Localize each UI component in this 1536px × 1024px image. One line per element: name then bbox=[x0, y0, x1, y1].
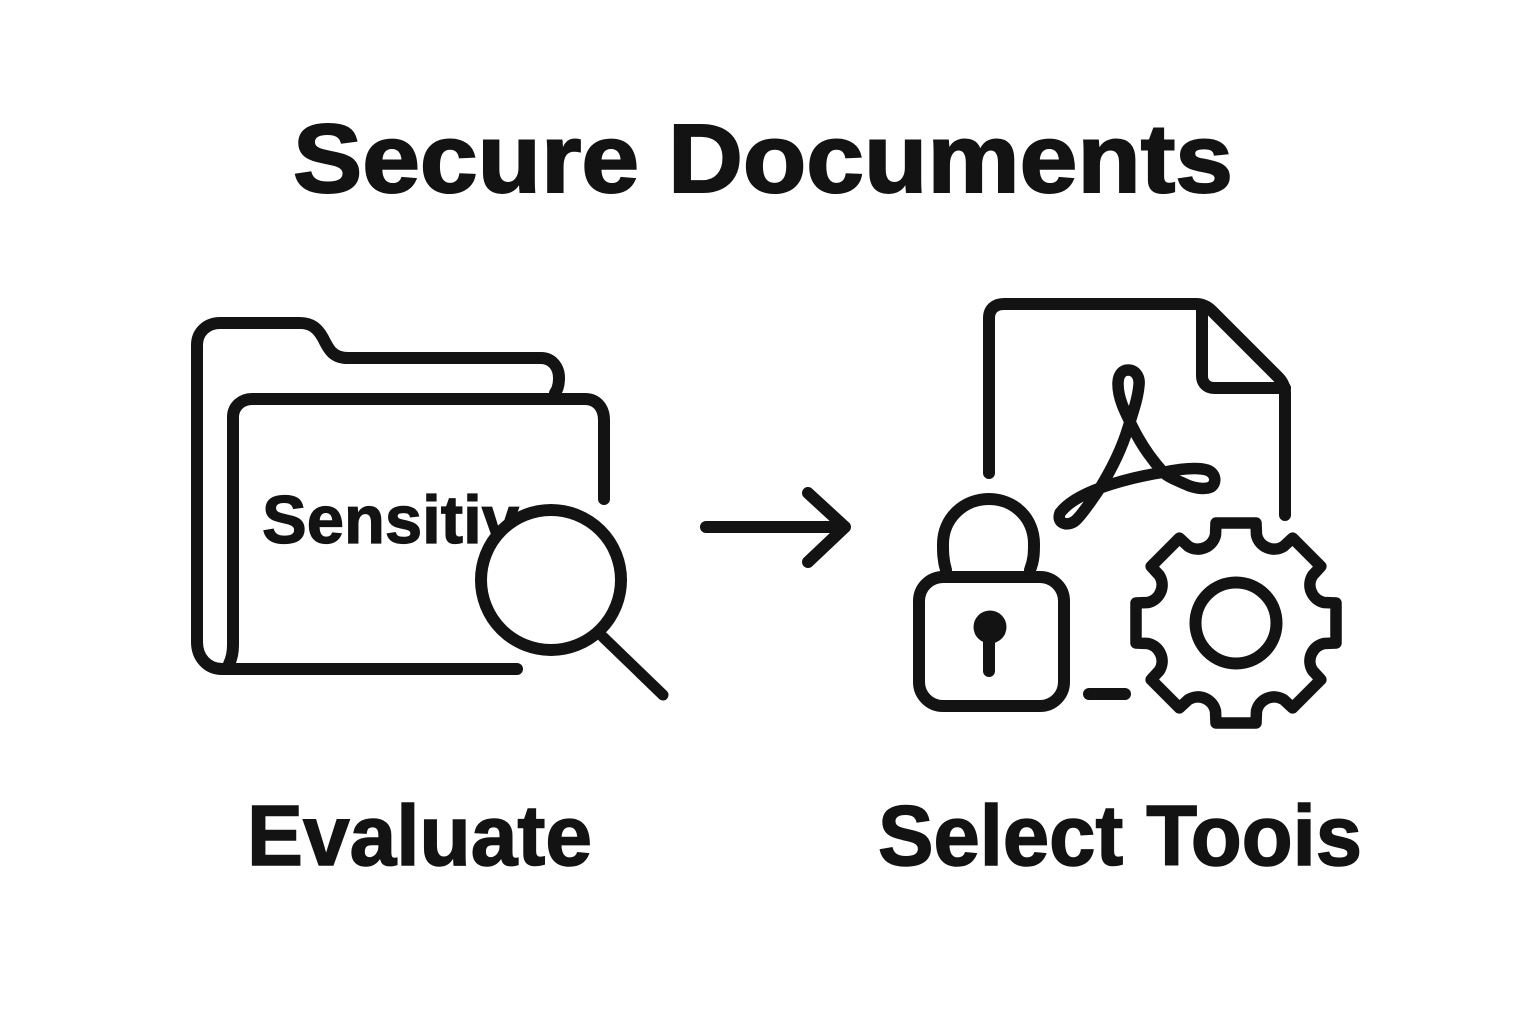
icon: PDF document, lock and gear bbox=[919, 304, 1336, 723]
title: Secure Documents bbox=[293, 104, 1233, 213]
label: evaluate: Evaluate bbox=[247, 789, 592, 884]
folder label: Sensitiv bbox=[262, 482, 519, 558]
gear hub bbox=[1196, 582, 1276, 664]
document outline bbox=[989, 304, 1285, 515]
magnifying glass bbox=[481, 510, 663, 695]
document fold bbox=[1202, 308, 1285, 388]
gear outline bbox=[1136, 523, 1336, 723]
padlock shackle bbox=[943, 499, 1034, 570]
gear bbox=[1136, 523, 1336, 723]
folder front bbox=[229, 399, 604, 664]
padlock body bbox=[919, 577, 1064, 706]
keyhole bbox=[974, 610, 1006, 671]
label: select tools: Select Toois bbox=[878, 789, 1362, 884]
arrow bbox=[706, 493, 845, 562]
folder back with tab bbox=[197, 323, 559, 669]
icon: folder with magnifying glass bbox=[197, 323, 663, 695]
connector dash bbox=[1089, 688, 1125, 700]
padlock bbox=[919, 499, 1064, 706]
PDF symbol bbox=[1059, 370, 1215, 524]
